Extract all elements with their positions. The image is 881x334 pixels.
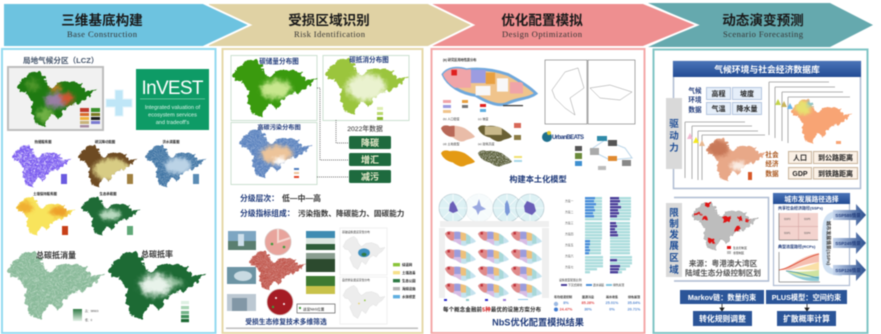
inset circle: dark red <box>267 289 293 315</box>
map: blue service: 洪水调蓄图 <box>163 139 180 144</box>
stats: measure percentages: 24.47% <box>560 308 573 312</box>
map: brown service: 碳沉降功能图 <box>95 139 116 144</box>
restricted area box <box>674 198 768 281</box>
text: grading levels: 低—中—高 <box>282 193 321 203</box>
label: climate data: 数据 <box>688 105 702 114</box>
button: reduce carbon <box>349 136 391 149</box>
arrow: SSP245: SSP245情景 <box>835 240 861 247</box>
small maps: site factors: (e) 建筑高度 <box>478 141 495 146</box>
chart: SSP quadrant: SSP4 <box>804 232 811 235</box>
InVEST card: Integrated valuation of <box>145 105 201 111</box>
model diagram: urban model: UrbanBEATS <box>552 135 584 141</box>
map: total carbon offset rate: 总碳抵率 <box>141 249 173 259</box>
label: driving force: 驱 <box>669 119 679 130</box>
text: grading levels: 分级层次： <box>240 193 279 203</box>
label: socioeconomic data: 数据 <box>765 169 779 178</box>
map: suitability one <box>340 228 387 275</box>
InVEST card <box>136 69 209 130</box>
heading: design optimization: Design Optimization <box>502 29 583 39</box>
label: driving force: 力 <box>669 142 679 154</box>
panel: scenario forecasting <box>654 50 868 333</box>
map stack: driver layers <box>685 122 766 181</box>
arrow: base construction <box>3 3 250 47</box>
arrow: SSP585 <box>833 204 866 226</box>
small maps: site factors: (b) 人口密度 <box>443 116 460 121</box>
label: restricted development zone: 区 <box>669 253 679 264</box>
InVEST card: InVEST <box>142 78 204 99</box>
bar chart: implementation: 方案七 <box>565 265 574 269</box>
label: restricted development zone: 限 <box>669 207 679 219</box>
LCZ legend <box>80 108 100 128</box>
socioeconomic factor boxes: 到铁路距离 <box>818 169 853 178</box>
database header <box>673 61 861 77</box>
chart: SSP quadrant: SSP1 <box>784 232 791 235</box>
caption: top five layouts: 每个概念金融前5种最优的设施方案分布 <box>443 306 542 314</box>
climate factor boxes: 高程 <box>712 89 726 98</box>
legend: measures: 设施类型配置比例 <box>559 278 582 282</box>
label: restricted development zone: 制 <box>669 218 679 230</box>
legend: land types <box>393 262 416 299</box>
map card: carbon pollution: 高碳污染分布图 <box>257 124 301 132</box>
pathway selection box <box>773 193 850 286</box>
button: sink <box>349 153 391 166</box>
stats: measure percentages: 0% <box>609 308 615 312</box>
model diagram: urban model <box>542 131 632 170</box>
label: restricted development zone: 发 <box>669 229 679 241</box>
panel: design optimization <box>432 49 644 333</box>
connector lines <box>317 88 349 177</box>
map stack: climate layers <box>769 82 851 144</box>
stats: measure percentages: 年均径流控制 <box>554 294 572 299</box>
small maps: site factors: (c) 坡度 <box>478 116 488 121</box>
photo: building <box>227 294 256 311</box>
bar chart: implementation: 方案一 <box>565 199 574 203</box>
heading: design optimization: 优化配置模拟 <box>501 12 583 28</box>
inset circle: pink <box>265 229 291 255</box>
stats: measure percentages: 雨水收集 <box>606 294 618 299</box>
chart title: RCP: 典型浓度路径(RCPs) <box>778 243 816 249</box>
arrow: PLUS down <box>805 304 809 311</box>
stats: measure percentages: 35.64% <box>628 301 641 305</box>
box: conversion rules: 转化规则调整 <box>699 314 746 324</box>
map: damaged area <box>249 251 305 290</box>
icon: plus <box>106 90 132 116</box>
map card: carbon stock: 碳储量分布图 <box>259 56 299 66</box>
legend: measures: 透水铺装 <box>593 283 604 287</box>
legend: measures: 下沉式绿地 <box>568 283 582 287</box>
map: suitability one: 基础设施类适宜性分布 <box>342 230 370 234</box>
panel: risk identification <box>222 49 422 333</box>
arrow: Markov down <box>720 304 724 311</box>
InVEST card: and tradeoff's <box>156 120 190 126</box>
text: data source: 陆域生态分级控制区划 <box>685 268 761 278</box>
map: restricted zones: 非限制区 <box>733 251 744 255</box>
map: total carbon offset: 低：0 <box>85 318 93 322</box>
chart: SSP quadrant: SSP5 <box>804 218 811 221</box>
map: suitability two: 自然修复类适宜性分布 <box>342 278 370 282</box>
chart: SSP quadrant: SSP3 <box>784 218 791 221</box>
chart title: SSP: 共享社会经济路径(SSPs) <box>778 204 824 210</box>
legend: measures <box>559 278 624 287</box>
arrow: SSP126: SSP126情景 <box>835 267 861 274</box>
map: purple service <box>12 139 70 187</box>
map: suitability two <box>340 277 387 324</box>
climate factor boxes: 降水量 <box>736 104 758 113</box>
chart: RCP fan <box>779 252 820 282</box>
bracket: future scenarios <box>825 213 842 273</box>
climate factor boxes: 气温 <box>712 104 726 113</box>
bar chart: implementation <box>565 197 632 273</box>
bar chart: implementation: 方案三 <box>565 221 574 225</box>
box: PLUS model: PLUS模型：空间约束 <box>772 293 841 302</box>
bracket: future scenarios: 城市发展情景(SSPs) <box>825 221 832 266</box>
small maps: site factors <box>441 116 522 167</box>
map: restricted zones <box>692 201 757 255</box>
map: yellow service: 土壤保持服务图 <box>33 191 57 196</box>
text: grading indicators: 污染指数、降碳能力、固碳能力 <box>298 208 404 218</box>
arrow: risk identification <box>208 3 473 47</box>
map: blue service <box>145 139 205 187</box>
radar charts <box>439 194 544 222</box>
pathway header: 城市发展路径选择 <box>784 194 839 204</box>
text: data source: 来源：粤港澳大湾区 <box>689 258 758 268</box>
bar chart: implementation: 方案二 <box>565 210 574 214</box>
map: total carbon offset rate <box>108 249 204 322</box>
LCZ map card <box>8 67 103 130</box>
legend box: 适宜NbS位置 <box>303 306 325 312</box>
text: grading levels <box>240 193 321 203</box>
stats: measure percentages: 85.28% <box>582 301 595 305</box>
stats: measure percentages <box>554 294 641 312</box>
map: purple service: 热储服务图 <box>35 139 52 144</box>
map: green service: 生态承载图 <box>100 191 117 196</box>
heading: risk identification: 受损区域识别 <box>288 12 370 28</box>
legend: measures: 绿色屋顶 <box>613 283 624 287</box>
climate factor boxes: 坡度 <box>740 89 754 98</box>
InVEST card: ecosystem services <box>148 112 197 118</box>
map panels: administrative outlines <box>545 60 635 124</box>
heading: risk identification <box>288 12 370 39</box>
photo: lake <box>306 231 335 250</box>
label: restricted development zone <box>666 203 682 277</box>
map card: carbon offset: 碳抵消分布图 <box>349 55 389 64</box>
heading: scenario forecasting: Scenario Forecasting <box>723 29 804 39</box>
map: brown service <box>78 139 136 187</box>
arrow: SSP245 <box>833 232 866 254</box>
photo: aerial <box>227 267 256 284</box>
map: land use <box>443 57 536 113</box>
label: climate data: 环境 <box>688 95 702 104</box>
map: land use: (a) 研究区用地性质分布 <box>443 57 477 62</box>
box: diffusion probability: 扩散概率计算 <box>783 314 830 324</box>
map: total carbon offset <box>7 250 103 322</box>
heading: NbS simulation result: NbS优化配置模拟结果 <box>492 316 584 328</box>
label: restricted development zone: 域 <box>669 264 679 276</box>
label: socioeconomic data: 社会 <box>765 150 779 159</box>
map grid: scenarios <box>439 221 549 301</box>
bar chart: implementation: 方案四 <box>565 232 574 236</box>
map: green service <box>81 191 139 236</box>
text: grading indicators <box>240 208 404 218</box>
socioeconomic factor boxes: GDP <box>792 171 808 178</box>
heading: base construction: Base Construction <box>67 29 138 39</box>
heading: base construction: 三维基底构建 <box>61 12 143 28</box>
heading: scenario forecasting: 动态演变预测 <box>722 12 804 28</box>
heading: LCZ: 局地气候分区（LCZ） <box>23 55 99 65</box>
legend: land types: 土壤改善 <box>402 270 416 275</box>
heading: base construction <box>61 12 143 39</box>
legend box <box>297 304 335 313</box>
chart: SSP quadrant <box>779 213 818 240</box>
socioeconomic factor boxes <box>788 152 858 179</box>
stats: measure percentages: 8% <box>563 301 569 305</box>
map: yellow service <box>16 191 74 236</box>
stats: measure percentages: 20.71% <box>628 308 641 312</box>
collage: technique screening <box>227 228 416 326</box>
box: Markov chain <box>680 290 764 304</box>
panel: base construction <box>2 49 216 333</box>
map card: carbon stock <box>231 56 317 120</box>
box: diffusion probability <box>777 311 836 326</box>
caption: screening: 受损生态修复技术多维筛选 <box>245 317 327 326</box>
label: 2022 data: 2022年数据 <box>347 124 383 133</box>
heading: build localized model: 构建本土化模型 <box>509 174 567 184</box>
map: restricted zones: 生态控制区 <box>733 246 747 250</box>
climate factor boxes <box>706 88 762 114</box>
label: driving force <box>666 98 682 169</box>
stats: measure percentages: 绿色屋顶 <box>628 294 640 299</box>
photo: terrace <box>306 276 335 294</box>
arrow: SSP126 <box>833 259 866 281</box>
button: sink: 增汇 <box>361 154 379 165</box>
text: grading indicators: 分级指标组成： <box>240 208 295 218</box>
label: climate data: 气候 <box>688 86 702 95</box>
box: Markov chain: Markov链：数量约束 <box>688 293 756 302</box>
label: climate data <box>688 86 702 114</box>
database box <box>673 61 861 188</box>
photo: city <box>228 231 256 250</box>
label: socioeconomic data <box>765 150 779 178</box>
socioeconomic factor boxes: 人口 <box>793 154 807 162</box>
button: reduce pollution <box>349 170 391 183</box>
database header: 气候环境与社会经济数据库 <box>714 64 820 74</box>
heading: design optimization <box>501 12 583 39</box>
bar chart: implementation: 方案六 <box>565 254 574 258</box>
label: socioeconomic data: 经济 <box>765 159 779 168</box>
map: total carbon offset: 高：58903 <box>85 309 99 313</box>
heading: risk identification: Risk Identification <box>294 29 366 39</box>
small maps: site factors: (d) 土地类型 <box>443 141 460 146</box>
arrow: design optimization <box>428 3 697 47</box>
button: reduce carbon: 降碳 <box>361 137 379 148</box>
legend: land types: 绿道网 <box>402 262 413 267</box>
text: data source <box>685 258 761 278</box>
photo: forest <box>306 253 335 272</box>
box: conversion rules <box>693 311 752 326</box>
stats: measure percentages: 25.01% <box>606 301 619 305</box>
map: total carbon offset: 总碳抵消量 <box>36 250 76 260</box>
box: PLUS model <box>766 290 847 304</box>
map card: carbon offset <box>323 55 409 120</box>
map card: carbon pollution <box>231 122 317 184</box>
socioeconomic factor boxes: 到公路距离 <box>818 153 853 162</box>
label: driving force: 动 <box>669 131 679 142</box>
stats: measure percentages: 30% <box>584 308 592 312</box>
bar chart: implementation: 方案五 <box>565 243 574 247</box>
legend: land types: 海绵设施 <box>402 286 416 291</box>
button: reduce pollution: 减污 <box>361 172 379 182</box>
heading: scenario forecasting <box>722 12 804 39</box>
legend: land types: 生态公园 <box>402 278 416 283</box>
arrow: scenario forecasting <box>648 3 873 47</box>
legend: land types: 水体修复 <box>402 294 416 299</box>
stats: measure percentages: 面源污染 <box>582 294 594 299</box>
label: restricted development zone: 展 <box>669 241 679 252</box>
arrow: SSP585: SSP585情景 <box>835 212 861 219</box>
